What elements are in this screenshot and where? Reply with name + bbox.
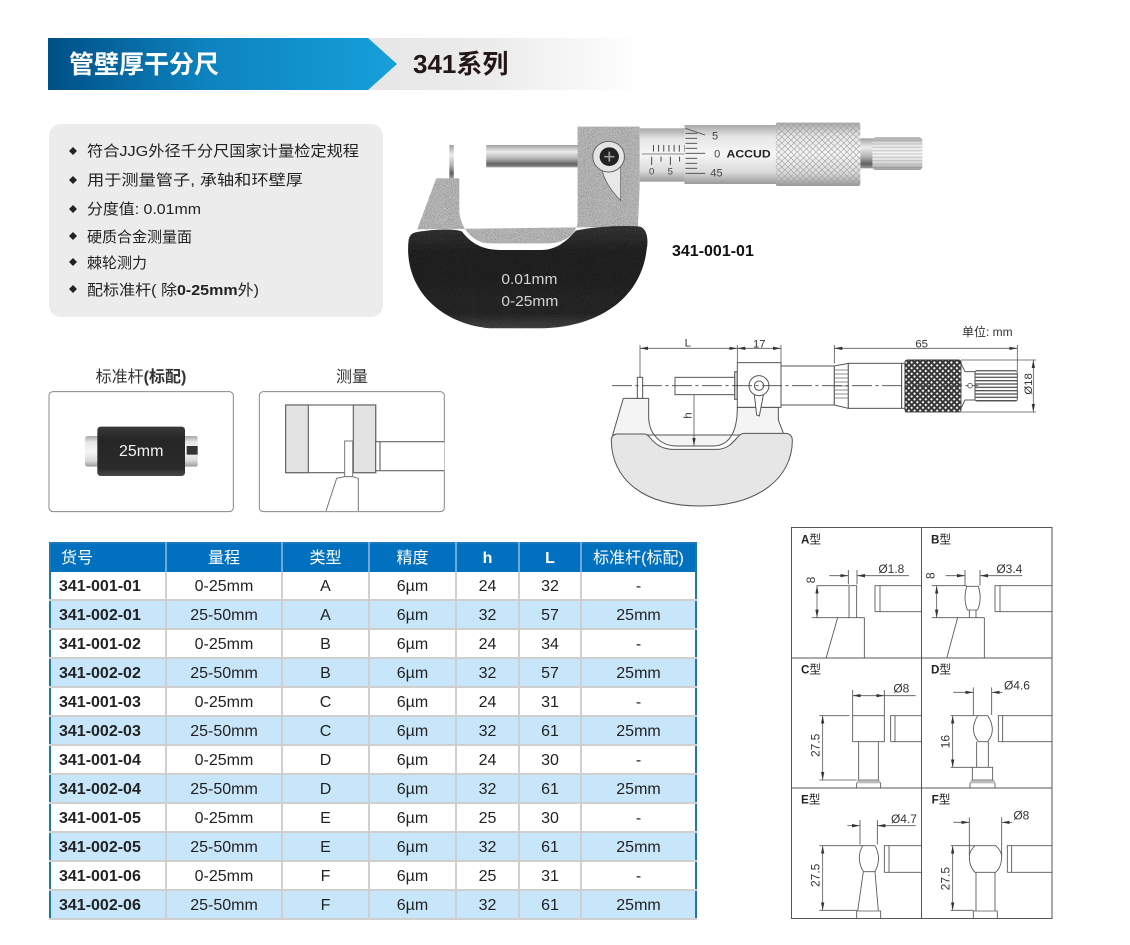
type D <box>931 662 1052 788</box>
specification table: 0-25mm <box>195 636 253 652</box>
specification table: 25-50mm <box>190 664 258 682</box>
thimble: ACCUD <box>727 149 771 161</box>
drawing knurl <box>905 360 961 412</box>
specification table: - <box>636 636 641 652</box>
specification table: E <box>320 838 331 856</box>
type A: Ø1.8 <box>878 562 905 576</box>
type D: Ø4.6 <box>1004 679 1030 693</box>
specification table: 25mm <box>616 664 661 682</box>
drawing sleeve block <box>737 363 781 407</box>
unit label: 单位: mm <box>962 324 1013 339</box>
standard bar heading: 标准杆(标配) <box>96 368 186 386</box>
dimension diameter 18: Ø18 <box>1023 373 1035 395</box>
type F: F型 <box>932 792 951 806</box>
specification table: 精度 <box>396 550 428 567</box>
drawing base <box>611 433 792 506</box>
frame range marking: 0-25mm <box>501 293 558 310</box>
specification table: 61 <box>541 780 559 798</box>
specification table: 341-002-01 <box>59 606 141 624</box>
specification table: 货号 <box>61 550 93 567</box>
title: 管壁厚干分尺 <box>69 51 219 79</box>
specification table: F <box>321 868 330 884</box>
spindle <box>486 145 578 167</box>
specification table: B <box>320 664 331 682</box>
specification table: C <box>320 694 331 710</box>
specification table: 341-002-02 <box>59 664 141 682</box>
model label: 341-001-01 <box>672 243 754 260</box>
specification table: 341-002-06 <box>59 896 141 914</box>
header grey band <box>368 38 644 90</box>
specification table: 341-001-05 <box>59 810 141 826</box>
specification table: 6µm <box>397 896 428 914</box>
drawing pin <box>637 377 643 398</box>
type D: 16 <box>939 735 953 748</box>
specification table: 25 <box>479 868 496 884</box>
header blue arrow <box>48 38 397 90</box>
drawing spindle <box>675 372 737 399</box>
thimble: 5 <box>712 131 718 143</box>
specification table: 6µm <box>397 810 428 826</box>
lock lever <box>593 141 624 201</box>
specification table: 0-25mm <box>195 578 253 594</box>
specification table: 6µm <box>397 838 428 856</box>
specification table: 0-25mm <box>195 868 253 884</box>
specification table: 25-50mm <box>190 722 258 740</box>
specification table: 61 <box>541 722 559 740</box>
specification table: 32 <box>479 838 496 856</box>
header banner <box>48 38 644 90</box>
spindle <box>376 442 444 471</box>
specification table: 25-50mm <box>190 606 258 624</box>
specification table: 6µm <box>397 752 428 768</box>
bar body <box>97 427 185 476</box>
specification table: C <box>320 722 331 740</box>
specification table: 25mm <box>616 606 661 624</box>
dimension L: L <box>685 338 691 350</box>
panel: features <box>49 124 383 317</box>
specification table: F <box>321 896 330 914</box>
drawing tube <box>781 366 834 405</box>
type B: Ø3.4 <box>996 562 1023 576</box>
specification table: 25mm <box>616 896 661 914</box>
specification table: h <box>483 550 492 567</box>
specification table: B <box>320 636 331 652</box>
specification table: 6µm <box>397 780 428 798</box>
specification table: 341-001-04 <box>59 752 141 768</box>
specification table: A <box>320 578 331 594</box>
specification table: 32 <box>479 606 496 624</box>
specification table: 6µm <box>397 664 428 682</box>
specification table: 30 <box>541 810 559 826</box>
type C: 27.5 <box>809 733 823 757</box>
type B <box>923 532 1052 658</box>
specification table: 标准杆(标配) <box>593 550 684 567</box>
feature list: 硬质合金测量面 <box>87 229 192 246</box>
specification table: 25mm <box>616 838 661 856</box>
tube section <box>286 405 376 473</box>
specification table: 24 <box>479 694 496 710</box>
specification table: 6µm <box>397 606 428 624</box>
specification table <box>49 542 697 920</box>
black frame cover <box>408 226 647 328</box>
thimble <box>684 125 778 184</box>
drawing frame tower <box>613 398 784 446</box>
dimension h: h <box>682 412 694 419</box>
bar label: 25mm <box>119 443 163 460</box>
centre line <box>612 384 978 387</box>
drawing lock <box>749 376 769 416</box>
type C <box>801 662 921 788</box>
panel: tip types <box>792 528 1052 918</box>
type E: E型 <box>801 792 821 806</box>
panel: standard bar <box>49 392 233 512</box>
specification table: 0-25mm <box>195 810 253 826</box>
specification table: 25mm <box>616 722 661 740</box>
specification table: 6µm <box>397 578 428 594</box>
type A <box>801 532 921 658</box>
drawing ratchet <box>961 363 1017 408</box>
specification table: 31 <box>541 868 559 884</box>
specification table: 32 <box>479 664 496 682</box>
specification table: 32 <box>541 578 559 594</box>
specification table: 57 <box>541 664 559 682</box>
feature list: 棘轮测力 <box>87 255 147 272</box>
ratchet <box>860 137 922 170</box>
frame <box>417 127 640 243</box>
frame marking: 0.01mm <box>501 271 557 288</box>
specification table: 341-002-04 <box>59 780 141 798</box>
specification table: 31 <box>541 694 559 710</box>
thimble: 45 <box>710 168 723 180</box>
type F: Ø8 <box>1013 808 1030 822</box>
type C: C型 <box>801 662 821 676</box>
specification table: 61 <box>541 896 559 914</box>
specification table: 341-001-06 <box>59 868 141 884</box>
dimension 17: 17 <box>753 338 766 350</box>
type E: 27.5 <box>809 863 823 887</box>
specification table: - <box>636 868 641 884</box>
type B: B型 <box>931 532 951 546</box>
feature list <box>69 143 359 299</box>
dimension drawing <box>611 338 1036 506</box>
drawing thimble <box>834 363 906 408</box>
specification table: 0-25mm <box>195 694 253 710</box>
type A: A型 <box>801 532 821 546</box>
specification table: D <box>320 752 331 768</box>
sleeve with scale: 5 <box>668 166 673 177</box>
features background <box>49 124 383 317</box>
knurled drum <box>776 123 860 186</box>
specification table: 341-001-01 <box>59 578 141 594</box>
type D: D型 <box>931 662 951 676</box>
specification table: - <box>636 752 641 768</box>
specification table: 341-002-05 <box>59 838 141 856</box>
specification table: 341-001-02 <box>59 636 141 652</box>
specification table: - <box>636 578 641 594</box>
type E <box>801 792 921 918</box>
specification table: 0-25mm <box>195 752 253 768</box>
thimble: 0 <box>714 149 720 161</box>
specification table: - <box>636 694 641 710</box>
anvil and pin <box>326 441 358 511</box>
specification table: 30 <box>541 752 559 768</box>
type B: 8 <box>923 572 937 579</box>
specification table: 6µm <box>397 694 428 710</box>
specification table: 32 <box>479 722 496 740</box>
specification table: D <box>320 780 331 798</box>
specification table: E <box>320 810 331 826</box>
measurement heading: 测量 <box>336 368 368 386</box>
specification table: 25-50mm <box>190 896 258 914</box>
sleeve with scale: 0 <box>649 166 654 177</box>
type F <box>932 792 1052 918</box>
specification table: 32 <box>479 896 496 914</box>
specification table: 25mm <box>616 780 661 798</box>
feature list: 分度值: 0.01mm <box>87 201 201 218</box>
specification table: 24 <box>479 578 496 594</box>
specification table: 341-001-03 <box>59 694 141 710</box>
panel frame <box>259 392 444 512</box>
sleeve with scale <box>640 128 686 182</box>
dimension 17 <box>737 338 781 363</box>
specification table: 类型 <box>309 550 342 567</box>
feature list: 配标准杆( 除 0-25mm 外) <box>87 282 259 299</box>
specification table: 量程 <box>208 550 240 567</box>
specification table: 25-50mm <box>190 780 258 798</box>
series name: 341系列 <box>413 49 508 79</box>
specification table: L <box>545 550 555 567</box>
dimension L <box>640 338 737 377</box>
specification table: 341-002-03 <box>59 722 141 740</box>
tip types grid <box>792 528 1052 918</box>
specification table: 34 <box>541 636 559 652</box>
dimension diameter 18 <box>905 360 1036 412</box>
specification table: 6µm <box>397 722 428 740</box>
specification table: 25-50mm <box>190 838 258 856</box>
feature list: 用于测量管子, 承轴和环壁厚 <box>87 172 303 189</box>
dimension 65 <box>834 338 1017 371</box>
specification table: 57 <box>541 606 559 624</box>
specification table: 24 <box>479 752 496 768</box>
panel frame <box>49 392 233 512</box>
feature list: 符合JJG外径千分尺国家计量检定规程 <box>87 143 359 160</box>
type C: Ø8 <box>893 681 910 695</box>
specification table: 6µm <box>397 868 428 884</box>
specification table: 6µm <box>397 636 428 652</box>
specification table: - <box>636 810 641 826</box>
dimension h <box>682 395 694 446</box>
dimension 65: 65 <box>915 338 928 350</box>
panel: measurement <box>259 392 444 512</box>
specification table: A <box>320 606 331 624</box>
specification table: 61 <box>541 838 559 856</box>
type F: 27.5 <box>939 867 953 890</box>
type A: 8 <box>804 576 818 583</box>
bar end caps <box>85 436 198 467</box>
specification table: 24 <box>479 636 496 652</box>
product photo: micrometer <box>408 123 922 328</box>
specification table: 32 <box>479 780 496 798</box>
specification table: 25 <box>479 810 496 826</box>
pin <box>449 145 454 178</box>
type E: Ø4.7 <box>891 812 917 826</box>
